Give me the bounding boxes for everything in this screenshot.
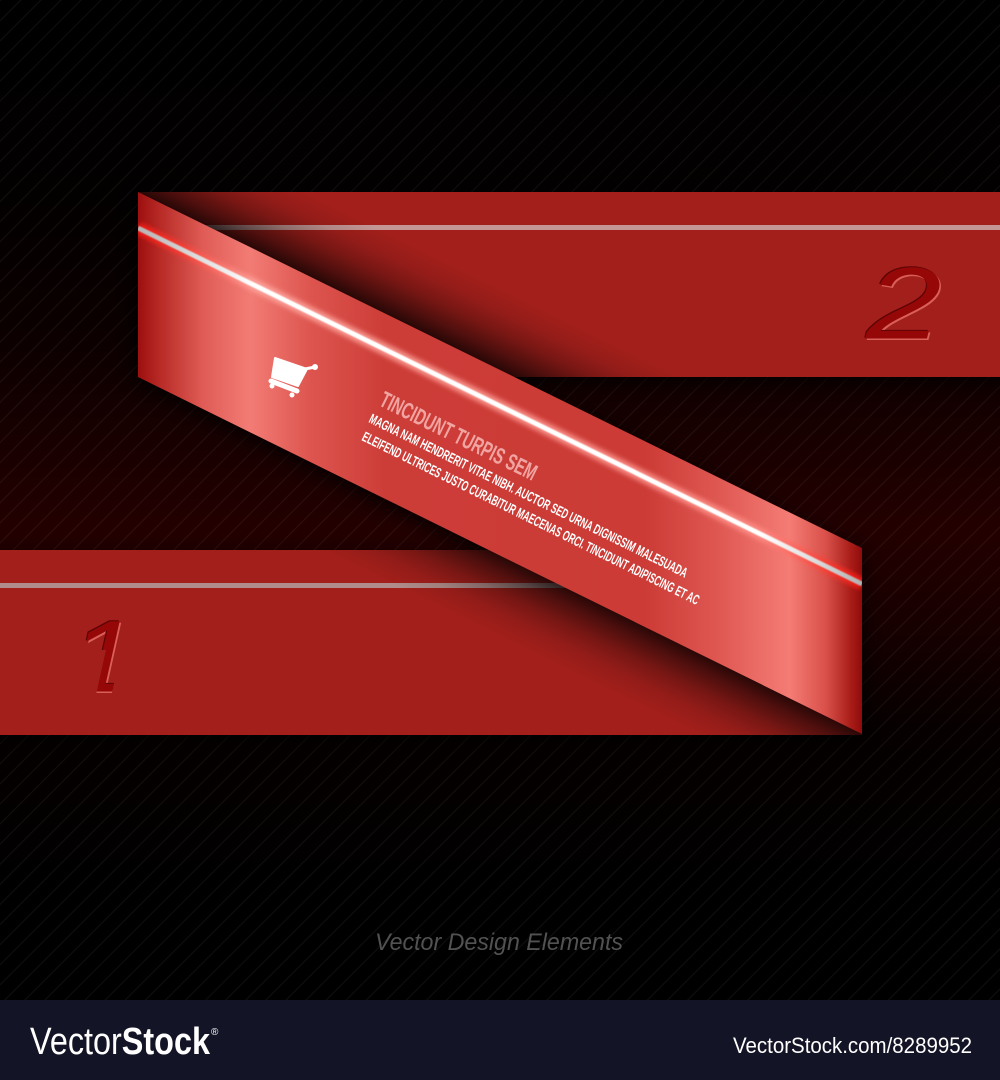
number 2: 2	[864, 246, 940, 360]
number 1	[86, 620, 122, 693]
footer logo: VectorStock	[30, 1021, 211, 1063]
band 1 shadow	[0, 550, 862, 735]
number 1: 1	[70, 601, 135, 714]
band 1	[0, 550, 862, 735]
band 1 line	[0, 583, 862, 588]
ribbon text line 2: ELEIFEND ULTRICES JUSTO CURABITUR MAECENAS ORCI. TINCIDUNT ADIPISCING ET AC	[360, 428, 702, 608]
number 1: 1	[69, 600, 134, 713]
band 2 line	[138, 225, 1000, 230]
icon: shopping cart	[270, 358, 318, 398]
ribbon highlight line	[138, 228, 862, 584]
tagline: Vector Design Elements	[375, 929, 623, 956]
band 2	[138, 192, 1000, 377]
footer url: VectorStock.com/8289952	[733, 1033, 972, 1058]
ribbon text line 1: MAGNA NAM HENDRERIT VITAE NIBH. AUCTOR SED URNA DIGNISSIM MALESUADA	[367, 410, 690, 581]
number 1: 1	[72, 602, 137, 715]
diagonal ribbon	[138, 192, 862, 734]
number 2: 2	[866, 248, 943, 362]
ribbon heading: TINCIDUNT TURPIS SEM	[376, 386, 542, 485]
band 2 shadow	[138, 192, 1000, 377]
number 2: 2	[865, 247, 941, 361]
registered mark: ®	[211, 1027, 219, 1038]
band shadows	[0, 198, 1000, 740]
footer bar	[0, 1000, 1000, 1080]
